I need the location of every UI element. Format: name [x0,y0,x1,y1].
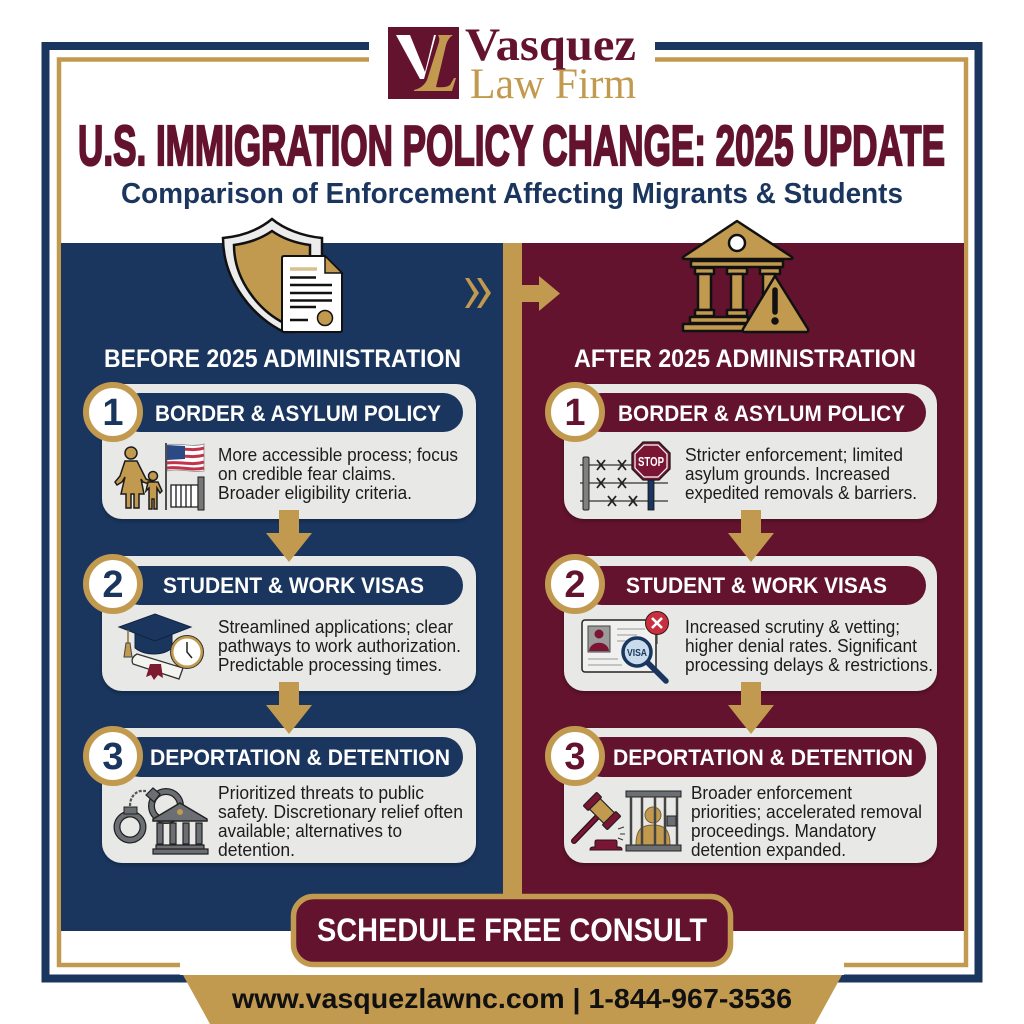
number badge: 1 [102,392,124,434]
arrow: right 2 to 3 [728,682,774,734]
number badge [86,557,140,611]
card text: More accessible process; focus [218,445,458,465]
icon: family, flag and gate [115,443,204,510]
card heading: STUDENT & WORK VISAS [626,573,887,598]
card text: detention. [218,840,295,860]
logo [388,19,636,108]
panel: before card 1 border and asylum [86,384,476,519]
card text [218,783,463,860]
footer gold banner [183,975,842,1024]
icon: barbed wire and stop sign [580,442,670,510]
subtitle: Comparison of Enforcement Affecting Migrants & Students [121,178,903,210]
card text: processing delays & restrictions. [685,655,933,675]
card text: asylum grounds. Increased [685,464,890,484]
panel: after card 3 deportation [548,728,937,863]
icon: handcuffs and courthouse [117,788,208,854]
card text: Streamlined applications; clear [218,617,453,637]
card text: safety. Discretionary relief often [218,802,463,822]
button: schedule free consult [294,896,730,964]
card heading: STUDENT & WORK VISAS [163,573,424,598]
number badge [548,385,602,439]
card heading: BORDER & ASYLUM POLICY [618,401,905,426]
number badge: 2 [102,564,124,606]
card heading: DEPORTATION & DETENTION [613,745,913,770]
number badge: 3 [102,736,124,778]
arrow: right [522,276,560,311]
number badge [86,729,140,783]
card text: Increased scrutiny & vetting; [685,617,900,637]
contact line: www.vasquezlawnc.com | 1-844-967-3536 [231,983,792,1014]
card text: Predictable processing times. [218,655,442,675]
panel: after card 2 visas [548,556,937,691]
number badge [548,729,602,783]
card text: available; alternatives to [218,821,402,841]
arrow: chevrons [465,278,491,308]
card text: Stricter enforcement; limited [685,445,903,465]
button: schedule free consult: SCHEDULE FREE CONSULT [317,912,707,948]
panel: after card 1 border and asylum [548,384,937,519]
card text [685,445,917,503]
card heading: DEPORTATION & DETENTION [150,745,450,770]
icon: barbed wire and stop sign: STOP [638,454,664,469]
icon: visa card, magnifier and denial [582,612,668,681]
icon: visa card, magnifier and denial: VISA [627,648,647,659]
card text: priorities; accelerated removal [691,802,922,822]
card text [685,617,933,675]
firm name: Law Firm [470,61,636,108]
card heading: BORDER & ASYLUM POLICY [155,401,441,426]
card text [691,783,922,860]
panel: before card 3 deportation [86,728,476,863]
card text: Broader eligibility criteria. [218,483,412,503]
card text: Prioritized threats to public [218,783,424,803]
number badge [548,557,602,611]
card text: pathways to work authorization. [218,636,461,656]
number badge: 1 [564,392,586,434]
heading: after: AFTER 2025 ADMINISTRATION [574,345,916,373]
icon: graduation cap, clock and diploma [119,614,204,680]
icon: shield and document [223,219,342,332]
firm name [465,19,636,108]
number badge: 2 [564,564,586,606]
logo mark [388,27,459,99]
panel: after 2025 background [522,243,964,931]
panel: before 2025 background [61,243,503,931]
card text: proceedings. Mandatory [691,821,876,841]
panel: before card 2 visas [86,556,476,691]
arrow: left 1 to 2 [266,510,312,562]
heading: before: BEFORE 2025 ADMINISTRATION [104,345,461,373]
firm name: Vasquez [465,19,636,71]
card text: higher denial rates. Significant [685,636,917,656]
card text: expedited removals & barriers. [685,483,917,503]
center divider [503,243,522,895]
arrow: left 2 to 3 [266,682,312,734]
icon: gavel and jail cell [574,791,681,851]
number badge [86,385,140,439]
number badge: 3 [564,736,586,778]
card text [218,617,461,675]
card text: on credible fear claims. [218,464,396,484]
arrow: right 1 to 2 [728,510,774,562]
card text: detention expanded. [691,840,846,860]
card text: Broader enforcement [691,783,852,803]
card text [218,445,458,503]
icon: courthouse and warning [683,221,808,332]
